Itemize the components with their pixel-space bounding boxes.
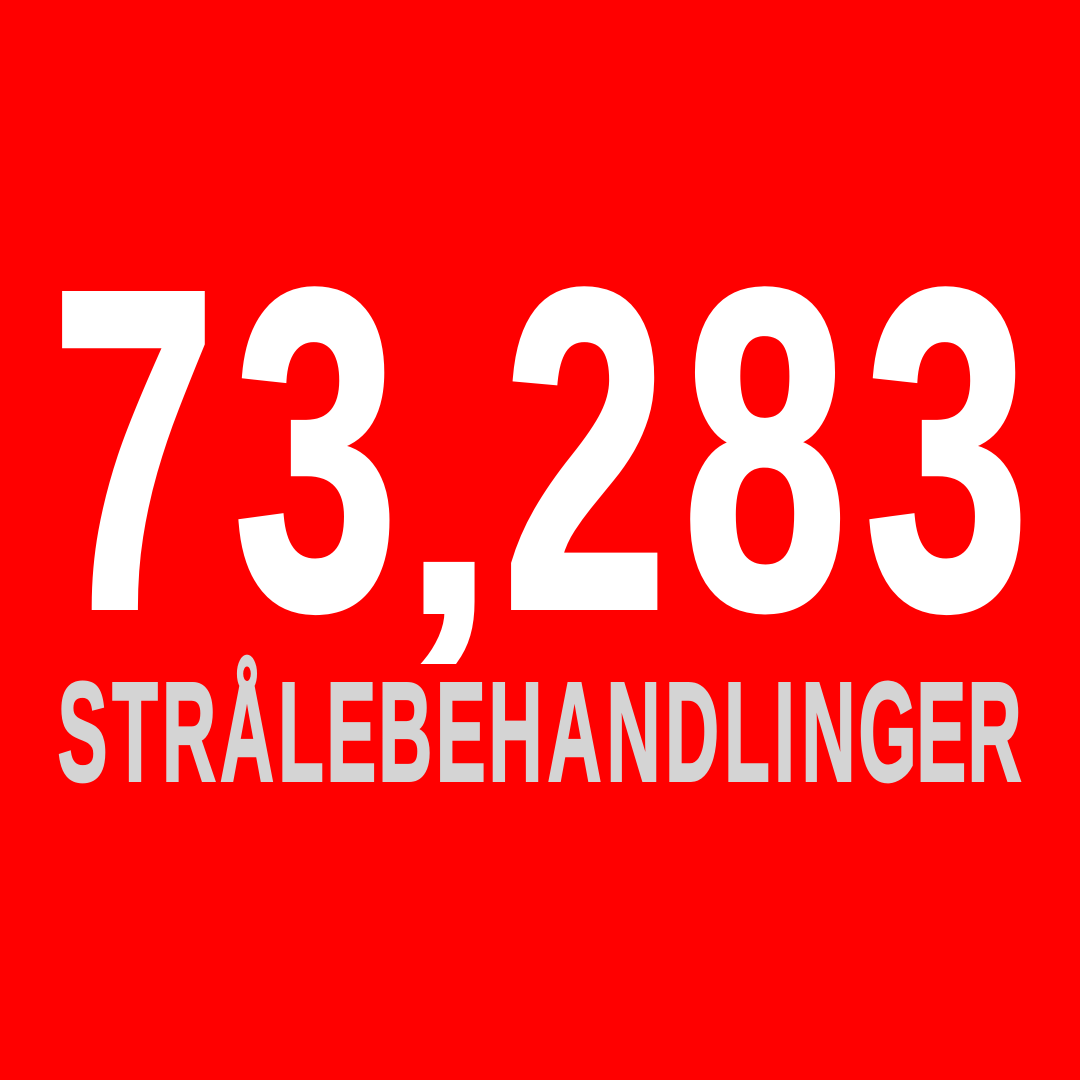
- big number: ,: [402, 321, 495, 681]
- big number: [51, 196, 1029, 704]
- label: treatments: STRÅLEBEHANDLINGER: [58, 652, 1022, 810]
- big number: 283: [503, 196, 1029, 704]
- big number: 73: [51, 196, 398, 704]
